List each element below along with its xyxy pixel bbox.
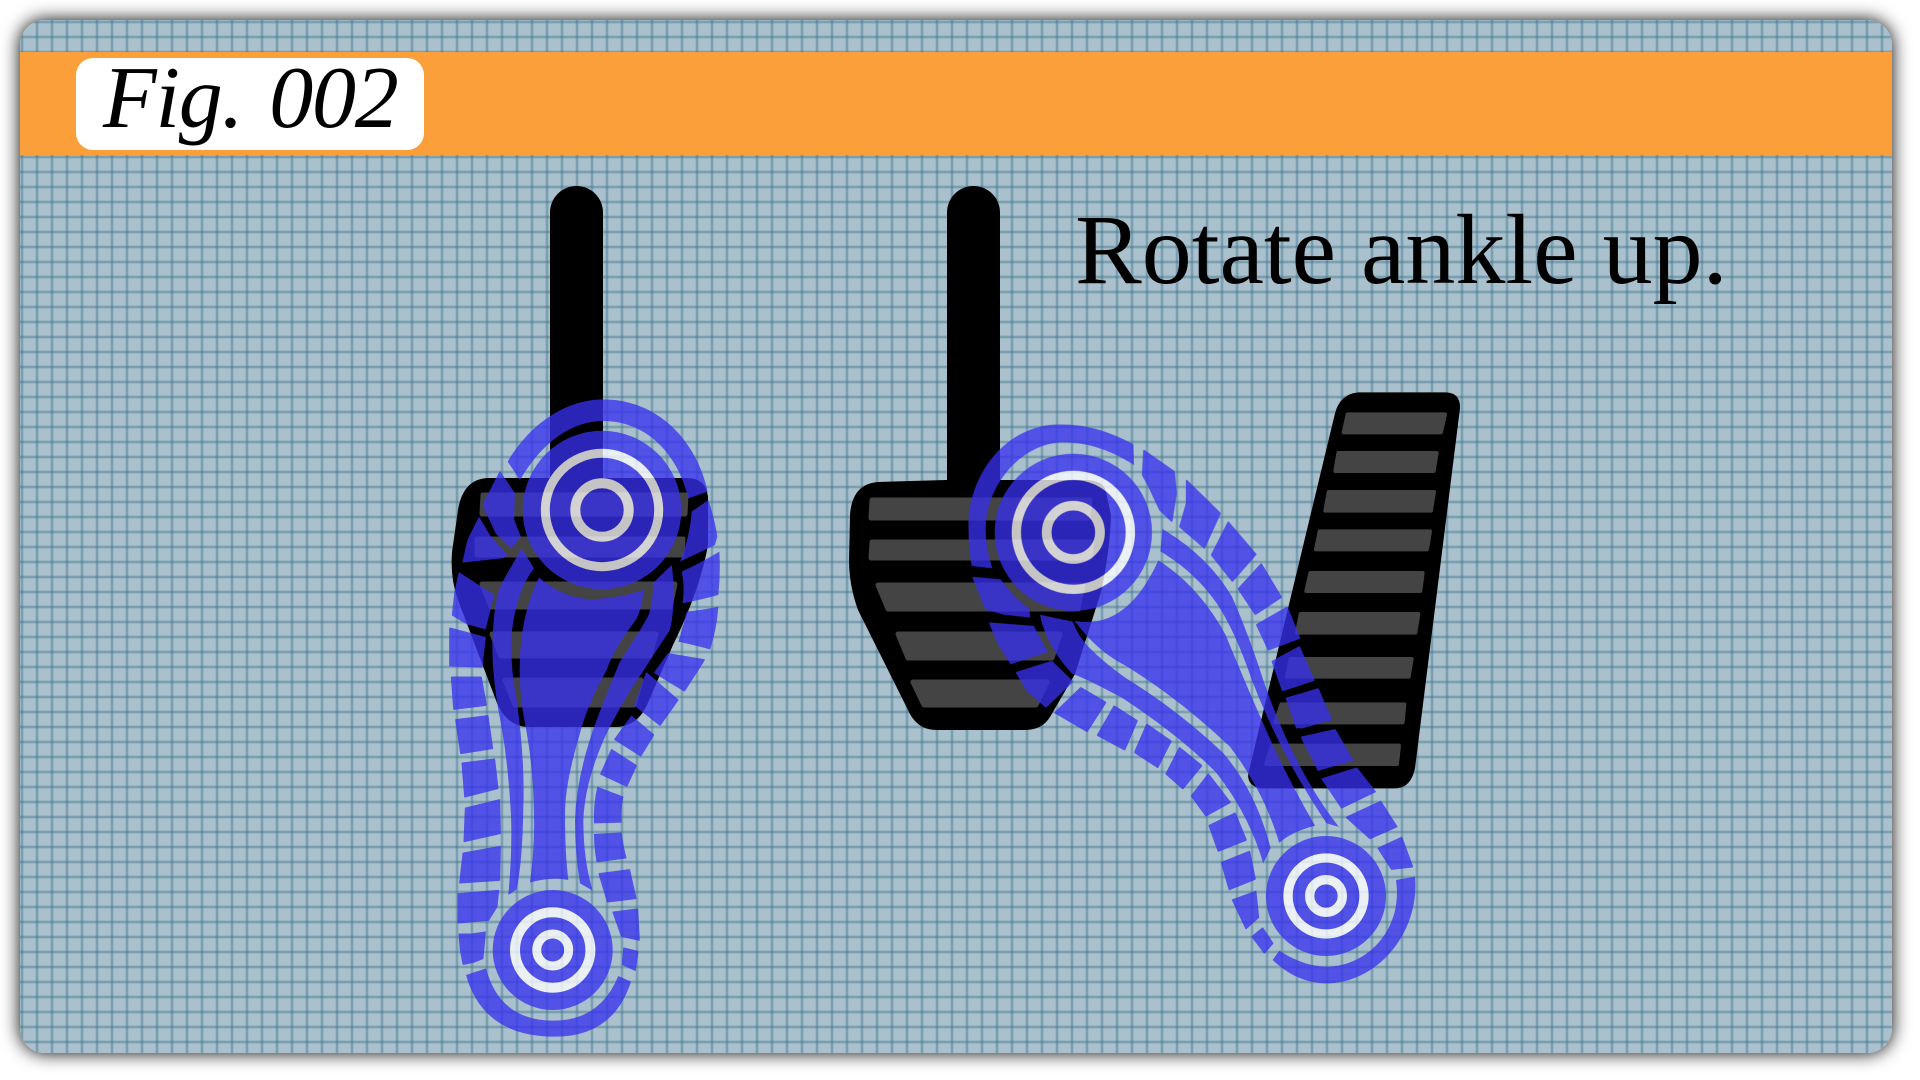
arch and outer tread <box>1040 529 1339 863</box>
caption: Rotate ankle up. <box>1075 194 1728 305</box>
heel target and heel tread <box>1192 689 1415 983</box>
accelerator pedal <box>1248 392 1460 788</box>
brake pedal: left <box>452 186 708 727</box>
footprint: ankle rotated up <box>968 424 1415 983</box>
brake pedal: right <box>849 186 1111 730</box>
header band <box>20 52 1892 155</box>
figure label: Fig. 002 <box>102 50 398 147</box>
ball of foot target and toe arc <box>968 424 1256 707</box>
heel target <box>493 890 613 1010</box>
ball of foot target <box>523 431 681 589</box>
sole tread and arch <box>450 399 720 1037</box>
footprint: ankle neutral <box>450 399 720 1037</box>
